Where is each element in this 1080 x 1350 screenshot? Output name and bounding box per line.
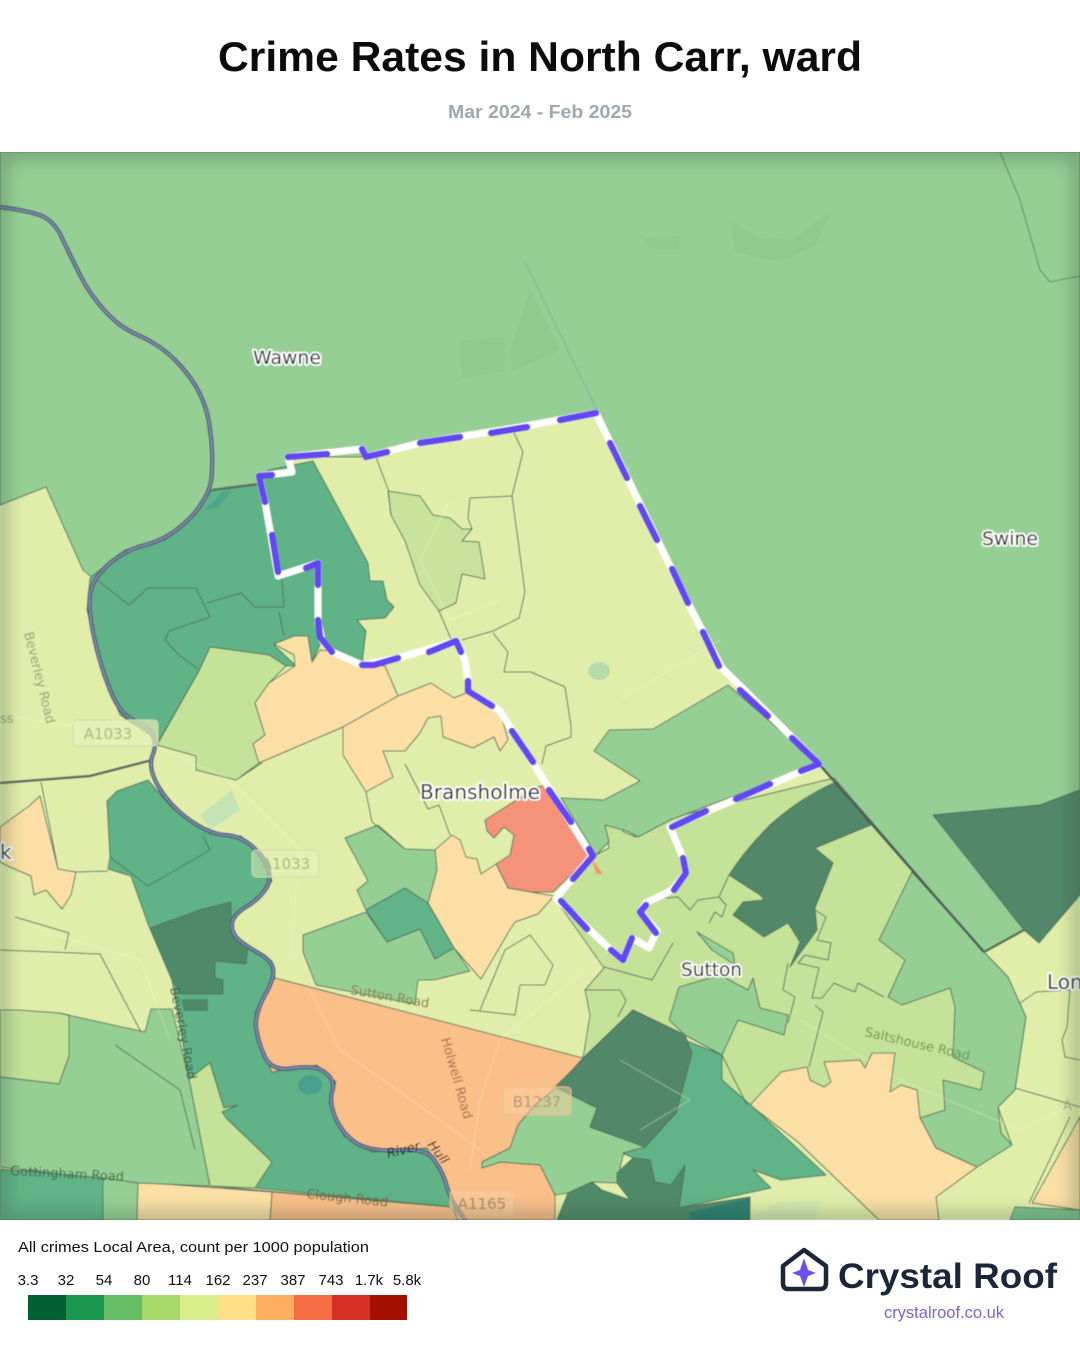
legend tick labels: 114 (168, 1272, 192, 1289)
road labels: ss (0, 712, 14, 727)
place labels: Bransholme (420, 780, 540, 804)
road labels: Gottingham Road (10, 1164, 124, 1185)
legend tick labels: 1.7k (355, 1272, 384, 1289)
road labels: River (385, 1139, 423, 1162)
region: east mid-light green band (879, 872, 1026, 1167)
region: Sutton mid-light green (669, 975, 788, 1055)
place labels: Sutton (681, 959, 742, 981)
region: tan area B (343, 683, 508, 792)
badge: A1033 west: A1033 (84, 725, 132, 743)
logo url: crystalroof.co.uk (884, 1304, 1005, 1322)
region: bottom-left green (0, 1169, 103, 1220)
region: south-west mid-light green (0, 1009, 210, 1186)
region: light green west of Bransholme (157, 647, 286, 780)
region: bottom orange strip (270, 1192, 458, 1220)
subtitle: date range: Mar 2024 - Feb 2025 (448, 102, 632, 122)
region: river corridor green (107, 780, 451, 1207)
region: salmon high-crime area (485, 785, 592, 892)
road labels: Hull (424, 1138, 451, 1168)
legend tick labels: 80 (134, 1272, 150, 1289)
region: light mid-green Bransholme centre (345, 825, 437, 910)
road labels: Beverley Road (20, 630, 57, 725)
region: bottom tan strip (137, 1182, 272, 1220)
River Hull (0, 207, 465, 1220)
badge: A1033 central (252, 850, 319, 877)
street network (0, 500, 1080, 1170)
patches: northern fields (460, 210, 832, 378)
badge: A1033 west (73, 720, 158, 746)
icon: house with star (783, 1250, 826, 1289)
road labels: A (1063, 1099, 1072, 1114)
region: ward north-west and river green area (87, 461, 394, 744)
title: Crime Rates in North Carr, ward (218, 33, 862, 80)
ward boundary: white base (259, 413, 819, 960)
badge: B1237: B1237 (513, 1093, 561, 1111)
logo wordmark: Crystal Roof (838, 1257, 1057, 1296)
place labels (0, 347, 1080, 994)
legend tick labels: 237 (242, 1272, 268, 1289)
badge: B1237 (503, 1087, 571, 1115)
road labels: Beverley Road (166, 986, 199, 1081)
road badges (73, 720, 571, 1218)
region: east light-green area (560, 777, 1026, 1146)
region: ward eastern green area (561, 685, 819, 855)
legend tick labels: 162 (205, 1272, 231, 1289)
legend (18, 1239, 422, 1320)
region: far-left tan (0, 796, 76, 909)
region: lower dark block (557, 1158, 750, 1220)
place labels: Swine (982, 528, 1038, 550)
region: far-right tan (1032, 1117, 1080, 1210)
region: Sutton small sliver (697, 932, 735, 965)
road labels: Holwell Road (437, 1036, 475, 1121)
legend tick labels: 743 (318, 1272, 344, 1289)
legend title: All crimes Local Area, count per 1000 population (18, 1239, 369, 1256)
road labels: Saltshouse Road (863, 1025, 971, 1064)
badge: A1165: A1165 (458, 1195, 506, 1213)
feature: teal reservoir (690, 1198, 750, 1220)
region: light mid-green Bransholme south (303, 912, 470, 1004)
thin roads and parish lines (0, 152, 1080, 952)
legend tick labels: 3.3 (18, 1272, 38, 1289)
region: dark block west of river (150, 902, 248, 1011)
legend tick labels: 5.8k (393, 1272, 422, 1289)
feature: golf course pale area (752, 1200, 820, 1220)
road labels: Sutton Road (349, 983, 430, 1012)
boundary lines (0, 433, 1080, 1207)
ponds (200, 490, 610, 1095)
region: far-right green strip (1010, 1207, 1080, 1220)
road labels: Clough Road (306, 1187, 389, 1211)
region: mid-green Bransholme south (366, 888, 454, 959)
region: orange area (255, 978, 583, 1220)
place labels: Wawne (253, 347, 321, 369)
map edge vignette (0, 152, 1080, 1220)
badge: A1033 central: A1033 (262, 855, 310, 873)
badge: A1165 (450, 1190, 514, 1218)
logo: Crystal Roof (783, 1250, 1057, 1322)
region: south central light green (482, 1087, 645, 1195)
ward boundary: purple dashes (259, 413, 819, 960)
region: small salmon fragment (592, 859, 603, 874)
road labels (0, 630, 1072, 1211)
place labels: k (0, 840, 12, 864)
region: south central mid-green (623, 1040, 826, 1208)
legend tick labels: 32 (58, 1272, 74, 1289)
region: bottom-left mid-light green (103, 1178, 138, 1220)
region: south-west light-green (0, 1010, 69, 1084)
legend tick labels: 54 (96, 1272, 112, 1289)
region: dark Sutton area (729, 782, 871, 967)
choropleth map (0, 152, 1080, 1220)
region: tan area C (428, 835, 554, 979)
region: tan area A (253, 636, 398, 763)
legend colour scale (28, 1295, 407, 1320)
legend tick labels: 387 (280, 1272, 306, 1289)
region: south-east tan (750, 1053, 977, 1220)
ward light-green pocket (388, 491, 485, 611)
region: dark low-crime area, east (933, 790, 1080, 943)
region: south central dark block (555, 1010, 692, 1147)
legend tick labels (18, 1272, 422, 1289)
region: northern rural area (0, 152, 1080, 952)
region: pale green pocket (189, 1063, 272, 1188)
